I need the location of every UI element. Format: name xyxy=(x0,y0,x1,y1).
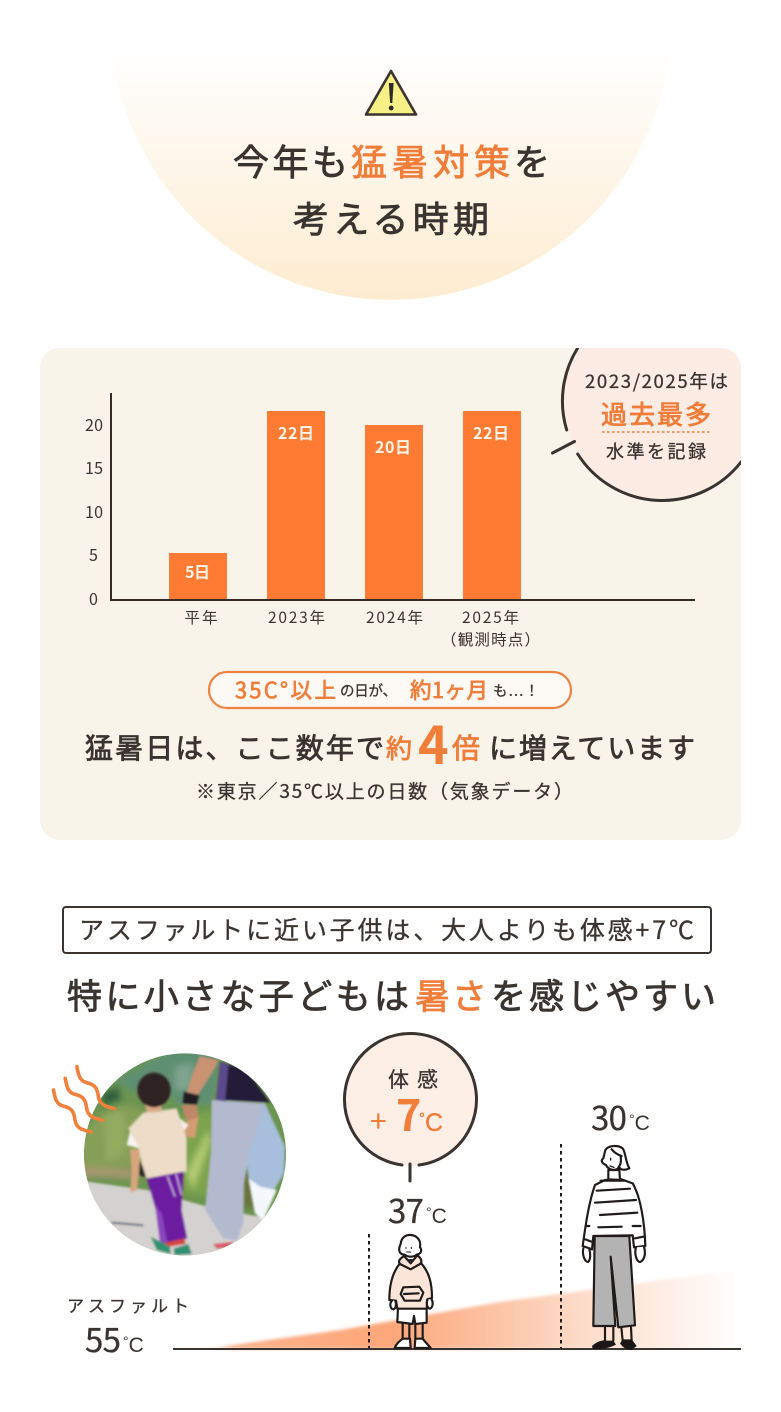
bar value labels: 5日 xyxy=(185,559,210,583)
adult xyxy=(205,1100,265,1241)
dotted height guides xyxy=(369,1144,561,1349)
ground line xyxy=(173,1348,741,1350)
main statement: 4 xyxy=(418,704,449,779)
icon: warning triangle xyxy=(366,71,416,114)
heading: small children feel heat: 特に小さな子どもは xyxy=(67,969,409,1020)
y axis labels: 5 xyxy=(89,542,98,566)
x axis labels: 2024年 xyxy=(366,606,423,628)
x axis labels: 2025年 xyxy=(462,606,519,628)
adult temperature xyxy=(591,1092,650,1140)
bar value labels: 20日 xyxy=(375,434,411,458)
child xyxy=(182,1117,199,1138)
heading: small children feel heat: を感じやすい xyxy=(491,969,716,1020)
pill: 35 degree note: 35C°以上 xyxy=(235,674,336,705)
callout: plus 7 degrees bubble: + xyxy=(370,1097,387,1141)
heading: small children feel heat: 暑さ xyxy=(415,969,487,1020)
callout: plus 7 degrees bubble: ° xyxy=(419,1110,425,1127)
child temperature xyxy=(388,1185,447,1233)
bar value labels xyxy=(185,420,509,583)
title line 1: 今年も xyxy=(233,134,348,186)
source note: ※東京／35℃以上の日数（気象データ） xyxy=(196,777,573,804)
asphalt temperature label: ° xyxy=(123,1333,129,1349)
x axis labels: 2023年 xyxy=(268,606,325,628)
callout: record level bubble: 水準を記録 xyxy=(606,438,706,464)
bar chart xyxy=(85,393,695,650)
hero: half circle header xyxy=(112,50,670,300)
photo: child and adult walking xyxy=(84,1053,286,1256)
y axis labels: 10 xyxy=(85,499,103,523)
callout: record level bubble: 過去最多 xyxy=(601,395,711,432)
figure: child xyxy=(389,1235,433,1348)
adult temperature: ° xyxy=(629,1111,635,1127)
figure: woman xyxy=(583,1146,645,1350)
pill: 35 degree note: も...！ xyxy=(493,680,539,701)
y axis labels: 15 xyxy=(85,455,103,479)
title line 1: を xyxy=(514,134,550,186)
asphalt temperature label xyxy=(67,1292,189,1362)
main statement xyxy=(85,704,695,779)
title line 1: 猛暑対策 xyxy=(351,134,510,186)
bars xyxy=(169,411,521,599)
pill: 35 degree note xyxy=(209,672,571,708)
icon: heat waves xyxy=(54,1067,114,1132)
main statement: 倍 xyxy=(452,727,480,767)
label box: asphalt and children: アスファルトに近い子供は、大人よりも体感+7℃ xyxy=(79,911,694,947)
title line 2: 考える時期 xyxy=(293,191,489,243)
asphalt temperature label: アスファルト xyxy=(67,1292,189,1317)
panel: heat days chart xyxy=(40,348,741,840)
y axis labels: 20 xyxy=(85,412,103,436)
callout: plus 7 degrees bubble: 7 xyxy=(396,1082,421,1144)
x axis labels: （観測時点） xyxy=(441,628,540,650)
x axis labels: 平年 xyxy=(184,606,218,628)
child temperature: C xyxy=(432,1205,447,1228)
title line 1 xyxy=(233,134,550,186)
callout: plus 7 degrees bubble xyxy=(344,1034,476,1181)
asphalt temperature label: 55 xyxy=(85,1314,121,1362)
callout: record level bubble xyxy=(550,348,741,502)
heat gradient wedge on the ground xyxy=(205,1270,735,1349)
adult temperature: C xyxy=(635,1112,650,1135)
asphalt temperature label: C xyxy=(129,1334,144,1357)
callout: plus 7 degrees bubble: C xyxy=(425,1109,443,1137)
bar value labels: 22日 xyxy=(278,420,314,444)
y axis labels: 0 xyxy=(89,586,98,610)
adult temperature: 30 xyxy=(591,1092,627,1140)
pill: 35 degree note: 約1ヶ月 xyxy=(410,674,488,705)
heading: small children feel heat xyxy=(67,969,716,1020)
callout: plus 7 degrees bubble: 体感 xyxy=(388,1064,438,1094)
callout: record level bubble: 2023/2025年は xyxy=(585,368,728,394)
bar value labels: 22日 xyxy=(473,420,509,444)
main statement: 猛暑日は、ここ数年で xyxy=(85,727,384,767)
y axis labels xyxy=(85,412,103,610)
main statement: に増えています xyxy=(489,727,695,767)
main statement: 約 xyxy=(386,729,412,766)
child temperature: ° xyxy=(426,1204,432,1220)
child temperature: 37 xyxy=(388,1185,424,1233)
x axis labels xyxy=(184,606,540,650)
pill: 35 degree note: の日が、 xyxy=(340,680,397,701)
